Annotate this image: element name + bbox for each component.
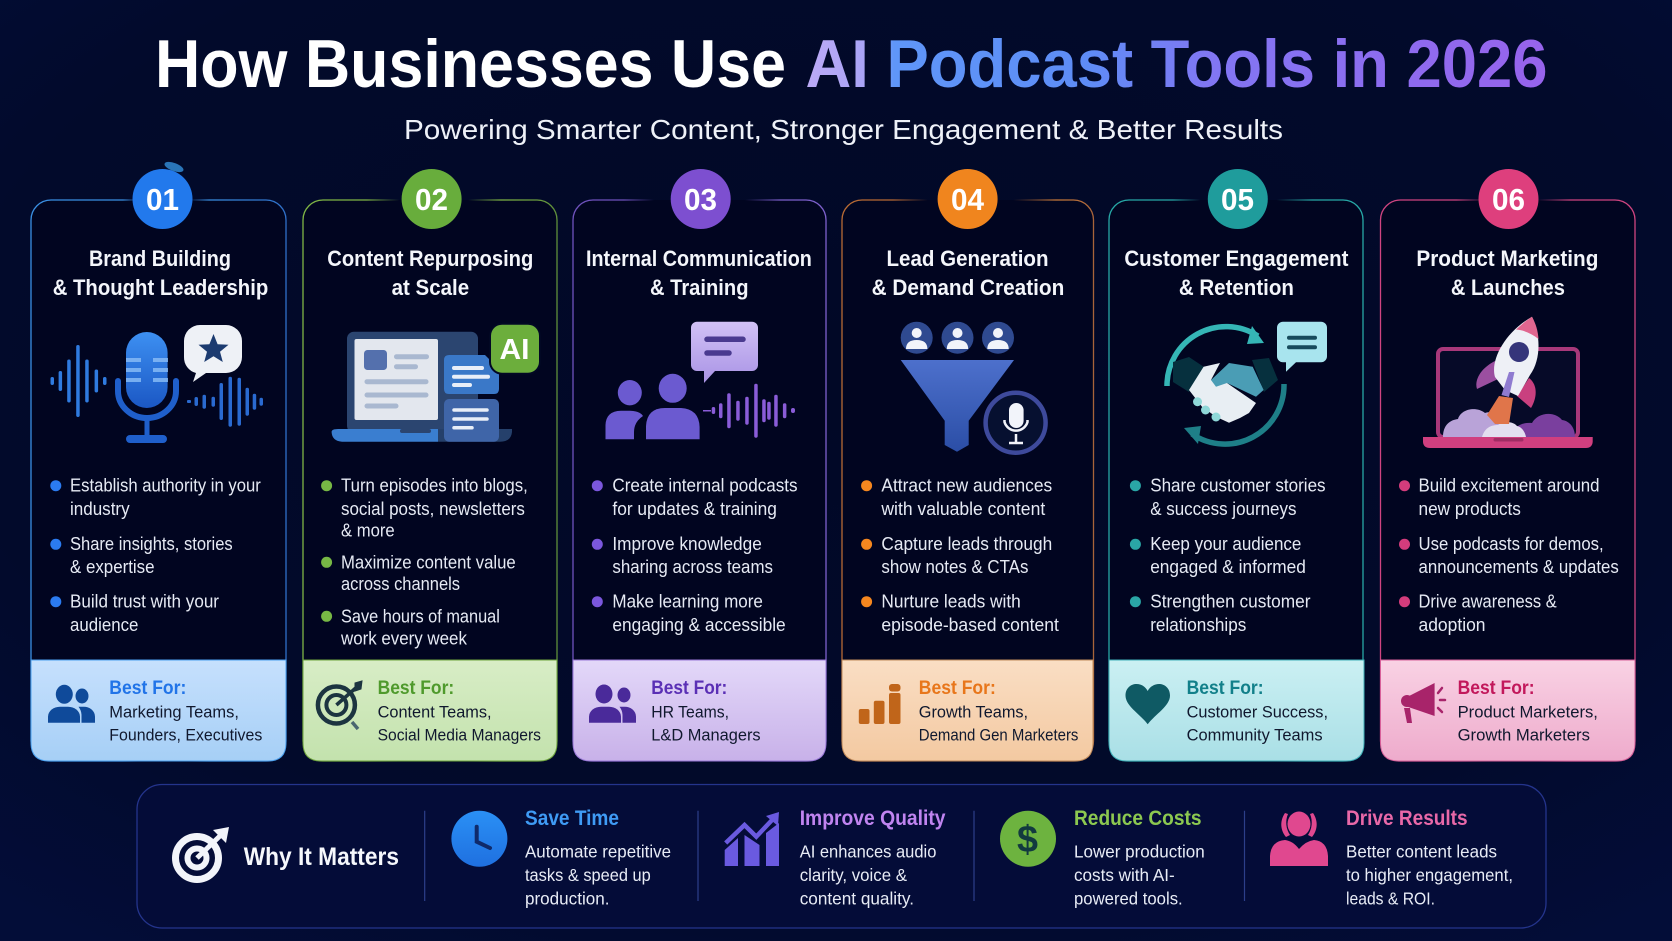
bullet list: Keep your audience xyxy=(1150,534,1301,554)
item: improve quality: content quality. xyxy=(800,888,914,908)
best for panel xyxy=(303,660,557,761)
number badge 01: 01 xyxy=(146,182,179,217)
best for panel: Growth Teams, xyxy=(919,702,1028,721)
item: improve quality: clarity, voice & xyxy=(800,865,907,885)
heading xyxy=(1416,246,1598,300)
bullet list: work every week xyxy=(340,628,468,648)
bullet list: announcements & updates xyxy=(1418,557,1619,577)
bullet list xyxy=(1399,476,1619,635)
number badge 02: 02 xyxy=(415,182,448,217)
best for panel: Best For: xyxy=(109,677,186,699)
icon: growth chart xyxy=(725,812,779,866)
number badge 05: 05 xyxy=(1221,182,1254,217)
bullet list: Attract new audiences xyxy=(881,476,1052,496)
icon: megaphone xyxy=(1401,683,1445,723)
bullet list: audience xyxy=(70,615,138,635)
why it matters label xyxy=(176,827,399,880)
bullet list: Capture leads through xyxy=(881,534,1052,554)
item: improve quality: Improve Quality xyxy=(800,806,946,830)
panel: 04 lead generation xyxy=(842,169,1094,761)
bullet list: Drive awareness & xyxy=(1418,592,1557,612)
best for panel xyxy=(31,660,286,761)
heading: & Retention xyxy=(1179,275,1294,300)
icon: team xyxy=(589,684,636,723)
item: drive results: leads & ROI. xyxy=(1346,888,1435,908)
item: reduce costs: costs with AI- xyxy=(1074,865,1175,885)
heading: Product Marketing xyxy=(1416,246,1598,271)
icon: team chat and waveform xyxy=(606,322,795,439)
heading: Brand Building xyxy=(89,246,231,271)
number badge 03: 03 xyxy=(684,182,717,217)
icon: laptop with documents and AI badge xyxy=(332,323,541,442)
bullet list: across channels xyxy=(341,574,460,594)
item: reduce costs: Reduce Costs xyxy=(1074,806,1202,830)
bullet list: & more xyxy=(341,521,395,541)
best for panel xyxy=(842,660,1093,761)
icon: handshake in cycle with chat bubble xyxy=(1167,322,1327,444)
best for panel: Customer Success, xyxy=(1187,702,1328,721)
best for panel: Best For: xyxy=(1187,677,1264,699)
bullet list xyxy=(861,476,1059,635)
bullet list: social posts, newsletters xyxy=(341,499,525,519)
heading xyxy=(586,246,812,300)
number badge 04: 04 xyxy=(951,182,985,217)
item: drive results xyxy=(1270,806,1513,908)
heading xyxy=(1124,246,1349,300)
number badge 06: 06 xyxy=(1492,182,1525,217)
bullet list: Build excitement around xyxy=(1418,476,1600,496)
item: reduce costs: powered tools. xyxy=(1074,888,1183,908)
panel: 06 product marketing xyxy=(1380,169,1635,761)
icon: team xyxy=(48,685,95,723)
bullet list: show notes & CTAs xyxy=(881,557,1028,577)
heading: Content Repurposing xyxy=(327,246,533,271)
panel: 02 content repurposing xyxy=(303,169,557,761)
heading: & Thought Leadership xyxy=(53,275,268,300)
heading xyxy=(327,246,533,300)
best for panel xyxy=(1109,660,1364,761)
best for panel: Founders, Executives xyxy=(109,726,262,745)
number badge 04 xyxy=(938,169,998,229)
item: drive results: Better content leads xyxy=(1346,841,1497,861)
bullet list xyxy=(592,476,798,635)
item: save time: Automate repetitive xyxy=(525,841,671,861)
bullet list xyxy=(321,476,528,648)
bullet list: with valuable content xyxy=(880,499,1045,519)
bullet list: new products xyxy=(1418,499,1521,519)
best for panel: Best For: xyxy=(378,677,454,699)
icon: laptop with documents and AI badge: AI xyxy=(500,334,530,366)
best for panel: Best For: xyxy=(1458,677,1535,699)
bullet list: Maximize content value xyxy=(341,552,516,572)
best for panel: HR Teams, xyxy=(651,702,729,721)
icon: dollar coin: $ xyxy=(1017,819,1038,861)
heading xyxy=(872,246,1064,300)
best for panel: L&D Managers xyxy=(651,726,761,745)
bullet list: industry xyxy=(70,499,130,519)
bullet list xyxy=(1130,476,1326,635)
heading: & Launches xyxy=(1451,275,1565,300)
title: How Businesses Use xyxy=(155,26,786,102)
bullet list: adoption xyxy=(1418,615,1486,635)
icon: target with arrow xyxy=(176,827,229,880)
item: reduce costs: Lower production xyxy=(1074,841,1205,861)
panel: 03 internal communication xyxy=(573,169,826,761)
bullet list: episode-based content xyxy=(881,615,1059,635)
bullet list: Nurture leads with xyxy=(881,592,1021,612)
panel: 01 brand building xyxy=(31,160,286,761)
item: drive results: Drive Results xyxy=(1346,806,1468,830)
heading xyxy=(53,246,268,300)
best for panel xyxy=(1380,660,1635,761)
panel: 05 customer engagement xyxy=(1109,169,1364,761)
item: save time: tasks & speed up xyxy=(525,865,651,885)
title: AI Podcast Tools in 2026 xyxy=(806,26,1548,102)
bullet list: engaging & accessible xyxy=(612,615,786,635)
bullet list xyxy=(50,476,261,635)
bullet list: Share insights, stories xyxy=(70,534,233,554)
bullet list: Make learning more xyxy=(612,592,763,612)
number badge 05 xyxy=(1208,169,1268,229)
bullet list: engaged & informed xyxy=(1150,557,1306,577)
best for panel: Demand Gen Marketers xyxy=(919,726,1078,745)
bullet list: Save hours of manual xyxy=(341,606,500,626)
bullet list: relationships xyxy=(1150,615,1246,635)
number badge 06 xyxy=(1478,169,1538,229)
item: save time: Save Time xyxy=(525,806,619,830)
bullet list: for updates & training xyxy=(612,499,777,519)
best for panel: Best For: xyxy=(919,677,996,699)
bullet list: & success journeys xyxy=(1150,499,1296,519)
best for panel: Product Marketers, xyxy=(1458,702,1598,721)
bullet list: & expertise xyxy=(70,557,154,577)
icon: bar chart xyxy=(859,684,900,724)
icon: target xyxy=(318,681,362,729)
number badge 02 xyxy=(402,169,462,229)
item: save time xyxy=(451,806,671,908)
heading: Lead Generation xyxy=(886,246,1048,271)
icon: people xyxy=(1270,812,1328,866)
icon: rocket launching from laptop xyxy=(1423,317,1593,448)
number badge 01 xyxy=(132,160,192,229)
icon: heart xyxy=(1126,684,1170,724)
best for panel: Best For: xyxy=(651,677,727,699)
item: improve quality xyxy=(725,806,946,908)
bullet list: Strengthen customer xyxy=(1150,592,1311,612)
icon: clock xyxy=(451,811,507,867)
bullet list: sharing across teams xyxy=(612,557,773,577)
heading: at Scale xyxy=(392,275,469,300)
best for panel xyxy=(573,660,826,761)
why it matters label: Why It Matters xyxy=(244,843,399,871)
bullet list: Create internal podcasts xyxy=(612,476,798,496)
icon: dollar coin xyxy=(1000,811,1056,867)
best for panel: Marketing Teams, xyxy=(109,702,239,721)
best for panel: Content Teams, xyxy=(378,702,492,721)
bullet list: Share customer stories xyxy=(1150,476,1326,496)
heading: Customer Engagement xyxy=(1124,246,1349,271)
title xyxy=(155,26,1548,102)
bullet list: Improve knowledge xyxy=(612,534,762,554)
heading: & Demand Creation xyxy=(872,275,1064,300)
icon: funnel with people and microphone xyxy=(901,322,1046,453)
item: drive results: to higher engagement, xyxy=(1346,865,1513,885)
best for panel: Community Teams xyxy=(1187,726,1323,745)
icon: microphone with sound waves and star bubble xyxy=(50,325,263,443)
bullet list: Establish authority in your xyxy=(70,476,261,496)
number badge 03 xyxy=(671,169,731,229)
item: save time: production. xyxy=(525,888,610,908)
best for panel: Social Media Managers xyxy=(378,726,541,745)
bullet list: Build trust with your xyxy=(70,592,219,612)
bullet list: Turn episodes into blogs, xyxy=(341,476,528,496)
item: reduce costs xyxy=(1000,806,1205,908)
item: improve quality: AI enhances audio xyxy=(800,841,936,861)
bullet list: Use podcasts for demos, xyxy=(1418,534,1604,554)
heading: & Training xyxy=(650,275,748,300)
heading: Internal Communication xyxy=(586,246,812,271)
panel: why it matters xyxy=(137,784,1546,928)
best for panel: Growth Marketers xyxy=(1458,726,1590,745)
subtitle: Powering Smarter Content, Stronger Engagement & Better Results xyxy=(404,114,1283,145)
